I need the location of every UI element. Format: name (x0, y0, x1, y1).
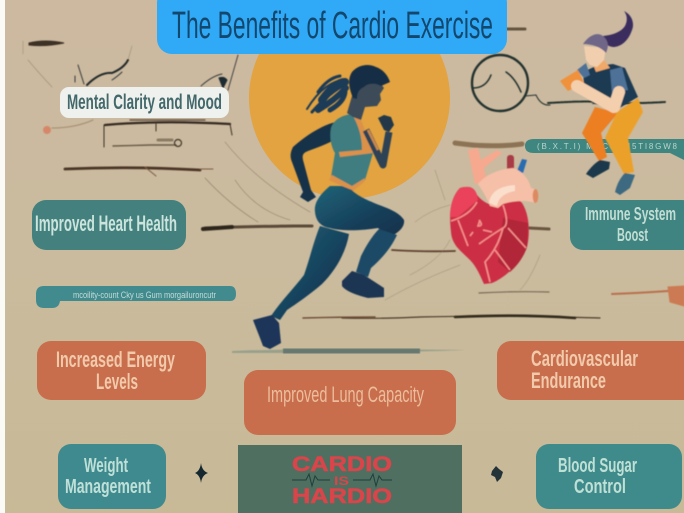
ponytail (307, 76, 346, 112)
label: blood sugar control: Control (574, 476, 626, 498)
small teal bar: mcoility-count Cky us Gum morgailuroncutr (73, 290, 216, 300)
neck (592, 60, 610, 72)
label: weight management: Management (65, 476, 151, 498)
vessels (468, 148, 502, 184)
face (584, 46, 606, 67)
hair (349, 65, 390, 99)
hips and front thigh (315, 186, 404, 237)
label: increased energy levels: Levels (96, 369, 138, 394)
label: immune system boost (570, 200, 684, 250)
label: weight management (58, 444, 166, 509)
upper arm highlight (368, 130, 378, 150)
label: mental clarity and mood (60, 87, 229, 118)
head and neck (347, 80, 384, 120)
teal bar behind exerciser (525, 139, 684, 160)
peach arm (577, 86, 619, 107)
label: improved heart health: Improved Heart Health (35, 211, 177, 236)
shirt (583, 64, 638, 112)
heart body (450, 187, 529, 284)
label: improved heart health (32, 200, 186, 250)
hair cap (583, 34, 608, 53)
anatomical heart (450, 148, 538, 284)
rear leg (271, 226, 349, 320)
exercising woman (560, 11, 643, 195)
icon: ink blot (491, 466, 503, 482)
orange arm (560, 70, 584, 91)
sleeves (577, 63, 628, 93)
right leg (605, 98, 643, 174)
front arm (366, 130, 389, 165)
hair ponytail (603, 11, 633, 47)
coronary veins (451, 202, 526, 282)
small teal bar (36, 286, 236, 308)
ecg lines (292, 474, 392, 486)
brush scratches (23, 29, 684, 318)
label: improved lung capacity (244, 370, 456, 435)
sun circle (249, 0, 450, 198)
waistband (329, 175, 365, 191)
icon: four-point star (195, 463, 208, 483)
rear shoe (253, 315, 281, 349)
label: cardiovascular endurance (497, 341, 684, 400)
dark chamber (498, 218, 528, 272)
cardio is hardio panel: HARDIO (292, 485, 392, 508)
fist (378, 115, 394, 132)
left shoe (586, 160, 610, 178)
sports top accent (339, 114, 373, 157)
label: immune system boost: Boost (617, 225, 648, 245)
label: increased energy levels: Increased Energy (56, 347, 175, 372)
label: blood sugar control (536, 444, 682, 509)
left leg (582, 107, 618, 161)
arch (478, 168, 537, 208)
right shoe (615, 173, 635, 195)
cardio is hardio panel: CARDIO (292, 453, 392, 476)
ground shadow (232, 348, 466, 354)
back arm (291, 120, 350, 202)
label: improved lung capacity: Improved Lung Capacity (267, 382, 424, 407)
title banner (157, 0, 507, 54)
circle doodle (472, 55, 665, 111)
teal bar behind exerciser: (B.X.T.I) MCCU TI5TI8GW8 (537, 142, 678, 151)
runner figure (253, 65, 404, 349)
label: cardiovascular endurance: Endurance (531, 368, 606, 393)
cardio is hardio panel (238, 445, 462, 513)
cardio is hardio panel: IS (334, 474, 349, 488)
front lower leg (356, 229, 397, 277)
label: weight management: Weight (84, 455, 128, 477)
front shoe (342, 271, 384, 298)
label: blood sugar control: Blood Sugar (558, 455, 637, 477)
upper lobe (450, 187, 478, 217)
label: increased energy levels (37, 341, 206, 400)
torso (330, 114, 373, 188)
label: mental clarity and mood: Mental Clarity and Mood (67, 91, 222, 114)
